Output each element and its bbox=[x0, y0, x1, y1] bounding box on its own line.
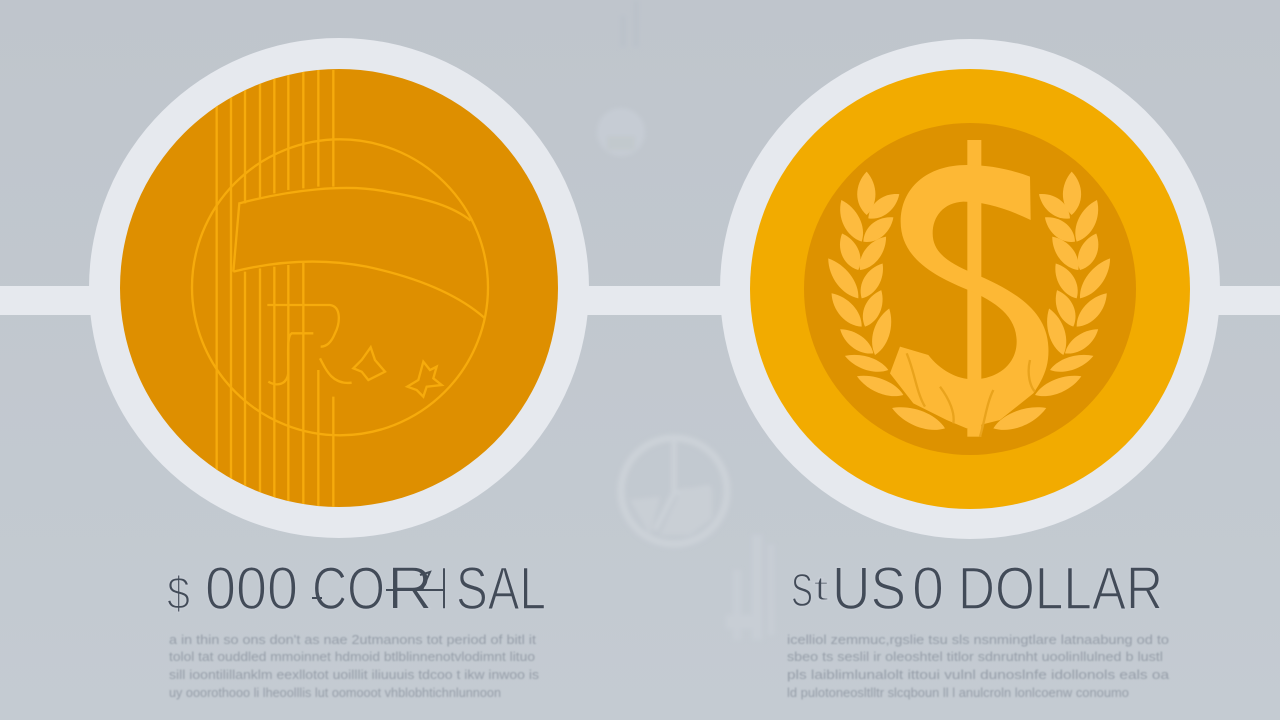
right heading: US bbox=[832, 555, 906, 622]
left coin ring bbox=[89, 38, 589, 538]
right heading: t bbox=[813, 570, 830, 608]
dollar S curve bbox=[890, 165, 1048, 428]
faded icon: small circle bbox=[597, 108, 645, 156]
right coin ring bbox=[720, 39, 1220, 539]
left heading: $ bbox=[167, 567, 190, 619]
left description: sill ioontilillanklm eexllotot uoilllit iliuuuis tdcoo t ikw inwoo is bbox=[169, 667, 540, 682]
wreath base shading bbox=[907, 353, 1035, 437]
right description: pls laiblimlunalolt ittoui vulnl dunoslnfe idollonols eals oa bbox=[787, 667, 1170, 682]
left heading bbox=[167, 555, 546, 622]
right heading: S bbox=[791, 564, 813, 616]
left coin engraving bbox=[192, 70, 488, 510]
right description bbox=[787, 632, 1170, 700]
right wreath bbox=[991, 172, 1117, 436]
right description: ld pulotoneosltlltr slcqboun ll l anulcroln lonlcoenw conoumo bbox=[787, 685, 1129, 700]
connector bars bbox=[0, 286, 1280, 315]
right heading: DOLLAR bbox=[958, 555, 1163, 622]
right coin inner disc bbox=[804, 123, 1136, 455]
left coin bbox=[89, 38, 589, 538]
left description: uy ooorothooo li lheoolllis lut oomooot vhblobhtichnlunnoon bbox=[169, 685, 501, 700]
right description: icelliol zemmuc,rgslie tsu sls nsnmingtlare latnaabung od to bbox=[787, 632, 1169, 647]
right heading bbox=[791, 555, 1163, 622]
right description: sbeo ts seslil ir oleoshtel titlor sdnrutnht uoolinllulned b lustl bbox=[787, 649, 1163, 664]
left heading: SAL bbox=[456, 555, 546, 622]
right coin face bbox=[750, 69, 1190, 509]
left heading: 000 bbox=[205, 555, 298, 622]
left heading: CO bbox=[312, 555, 385, 622]
faded icon: top bars bbox=[620, 0, 639, 47]
left heading: R bbox=[387, 555, 433, 622]
left description: a in thin so ons don't as nae 2utmanons tot period of bitl it bbox=[169, 632, 536, 647]
dollar stem bbox=[967, 140, 981, 437]
faded icon: pie chart bbox=[621, 435, 727, 544]
left heading: I bbox=[440, 555, 448, 622]
faded icon: vertical bars bbox=[726, 535, 774, 640]
right coin bbox=[720, 39, 1220, 539]
left description: tolol tat ouddled mmoinnet hdmoid btlblinnenotvlodimnt lituo bbox=[169, 649, 535, 664]
left description bbox=[169, 632, 540, 700]
dollar sign and wreath bbox=[822, 140, 1117, 437]
left wreath bbox=[822, 172, 948, 436]
left coin face bbox=[120, 69, 558, 507]
right heading: 0 bbox=[912, 555, 944, 622]
